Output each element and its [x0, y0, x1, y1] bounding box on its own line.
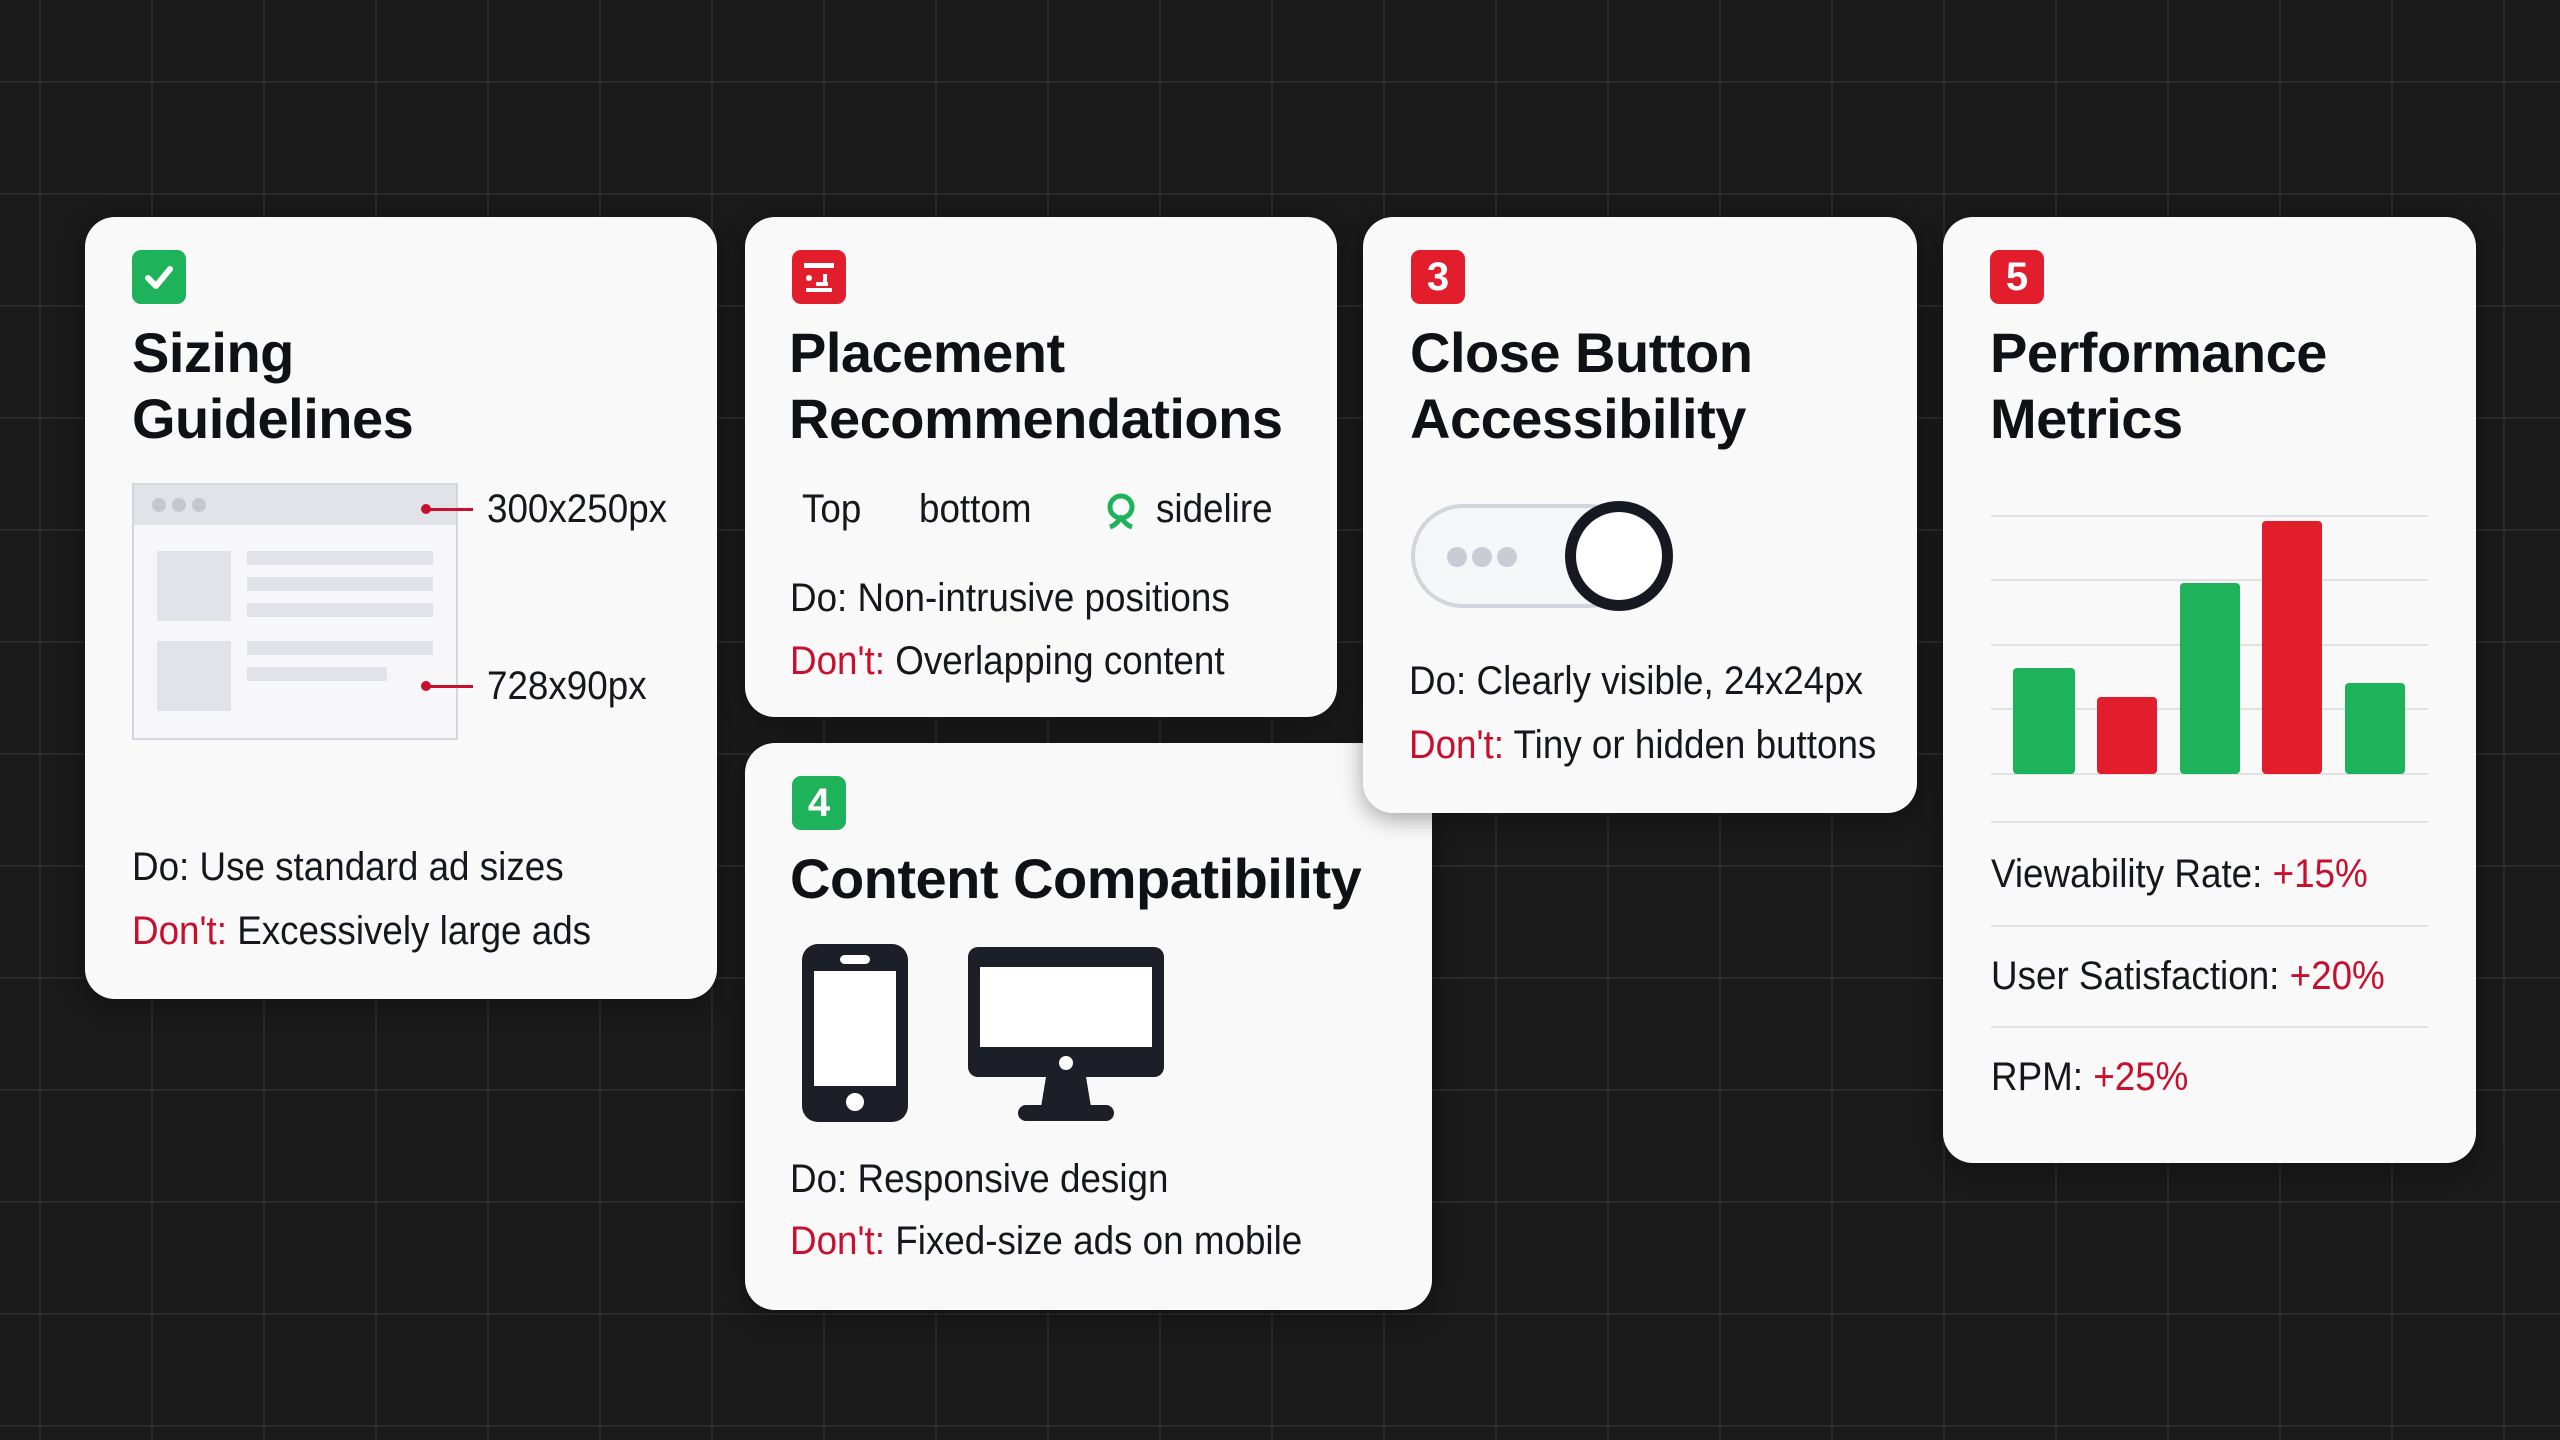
icon: number 4 — [792, 776, 846, 830]
heading: Performance Metrics: Performance — [1990, 321, 2327, 384]
illustration: browser mockup — [132, 483, 458, 740]
text: do: Do: Responsive design — [790, 1157, 1168, 1201]
icon: number 5: 5 — [2006, 255, 2028, 299]
heading: Sizing Guidelines: Sizing — [132, 321, 294, 384]
text: do: Do: Use standard ad sizes — [132, 845, 564, 889]
icon: phone — [802, 944, 908, 1122]
heading: Close Button Accessibility — [1410, 321, 1752, 450]
callout: 300x250px: 300x250px — [487, 487, 667, 531]
metric list: User Satisfaction: +20% — [1991, 954, 2385, 998]
position options: Top — [802, 487, 861, 531]
text: don't: Don't: Tiny or hidden buttons — [1409, 723, 1876, 767]
illustration: toggle close button — [1411, 501, 1673, 611]
position options: sidelire — [1156, 487, 1273, 531]
icon: green check — [132, 250, 186, 304]
icon: number 3 — [1411, 250, 1465, 304]
panel: content compatibility — [745, 743, 1432, 1310]
panel: close button accessibility — [1363, 217, 1917, 813]
panel: sizing guidelines — [85, 217, 717, 999]
panel: performance metrics — [1943, 217, 2476, 1163]
icon: number 3: 3 — [1427, 255, 1449, 299]
heading: Close Button Accessibility: Close Button — [1410, 321, 1752, 384]
icon: number 5 — [1990, 250, 2044, 304]
panel: placement recommendations — [745, 217, 1337, 717]
heading: Close Button Accessibility: Accessibility — [1410, 387, 1746, 450]
metric list: RPM: +25% — [1991, 1055, 2188, 1099]
icon: red placement — [792, 250, 846, 304]
text: don't: Don't: Overlapping content — [790, 639, 1225, 683]
position options: bottom — [919, 487, 1032, 531]
heading: Placement Recommendations: Placement — [789, 321, 1065, 384]
heading: Sizing Guidelines: Guidelines — [132, 387, 413, 450]
heading: Performance Metrics — [1990, 321, 2327, 450]
icon: desktop monitor — [968, 947, 1164, 1121]
metric list — [1991, 821, 2428, 1099]
position options — [802, 487, 1273, 531]
heading: Performance Metrics: Metrics — [1990, 387, 2183, 450]
callout: 728x90px: 728x90px — [487, 664, 647, 708]
icon: green sideline marker — [1108, 494, 1134, 530]
text: don't: Don't: Fixed-size ads on mobile — [790, 1219, 1302, 1263]
heading: Content Compatibility: Content Compatibility — [790, 847, 1361, 910]
bar chart — [1991, 515, 2428, 775]
heading: Sizing Guidelines — [132, 321, 413, 450]
metric list: Viewability Rate: +15% — [1991, 852, 2368, 896]
icon: number 4: 4 — [808, 781, 830, 825]
text: do: Do: Clearly visible, 24x24px — [1409, 659, 1863, 703]
heading: Placement Recommendations — [789, 321, 1282, 450]
text: do: Do: Non-intrusive positions — [790, 576, 1230, 620]
text: don't: Don't: Excessively large ads — [132, 909, 591, 953]
heading: Placement Recommendations: Recommendations — [789, 387, 1282, 450]
